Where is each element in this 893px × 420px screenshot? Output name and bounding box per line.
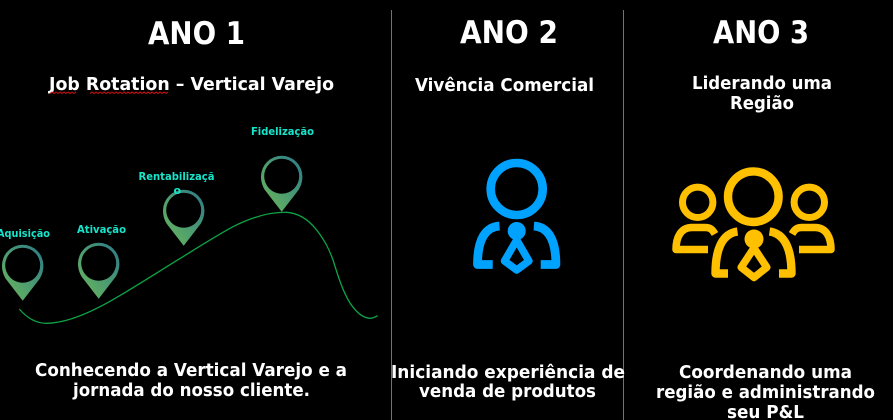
text block: ano 3 description: Coordenando uma [679,362,852,383]
text block: ano 3 description [656,362,875,420]
text block: ano 1 description [35,360,347,401]
label: rentabilização: o [174,184,182,197]
icon: team of three people [676,171,831,278]
label: rentabilização: Rentabilizaçã [138,170,214,183]
text block: ano 2 description [391,362,625,402]
text block: ano 2 description: Iniciando experiência de [391,362,625,383]
icon: pin rentabilização [163,190,204,246]
icon: pin fidelização [261,156,302,212]
text block: ano 2 description: venda de produtos [419,381,596,402]
icon: pin aquisição [2,245,43,301]
panel: ano 3 [656,15,875,420]
chart: customer journey curve [19,212,378,323]
title: ano 3: ANO 3 [713,15,809,51]
text block: ano 3 description: região e administrando [656,382,875,403]
panel: ano 2 [391,15,625,402]
title: ano 2: ANO 2 [460,15,558,51]
title: ano 1: ANO 1 [148,16,245,52]
label: rentabilização [138,170,214,197]
heading: liderando uma região: Região [730,93,794,114]
heading: liderando uma região: Liderando uma [692,73,832,94]
text block: ano 1 description: Conhecendo a Vertical Varejo e a [35,360,347,381]
panel: ano 1 [0,16,378,401]
heading: vivência comercial: Vivência Comercial [415,75,594,96]
heading: job rotation: Job Rotation – Vertical Varejo [47,74,334,95]
label: ativação: Ativação [77,223,126,236]
heading: liderando uma região [692,73,832,114]
label: fidelização: Fidelização [251,125,314,138]
text block: ano 1 description: jornada do nosso cliente. [72,380,310,401]
icon: person with tie [478,163,556,270]
icon: pin ativação [78,243,119,299]
